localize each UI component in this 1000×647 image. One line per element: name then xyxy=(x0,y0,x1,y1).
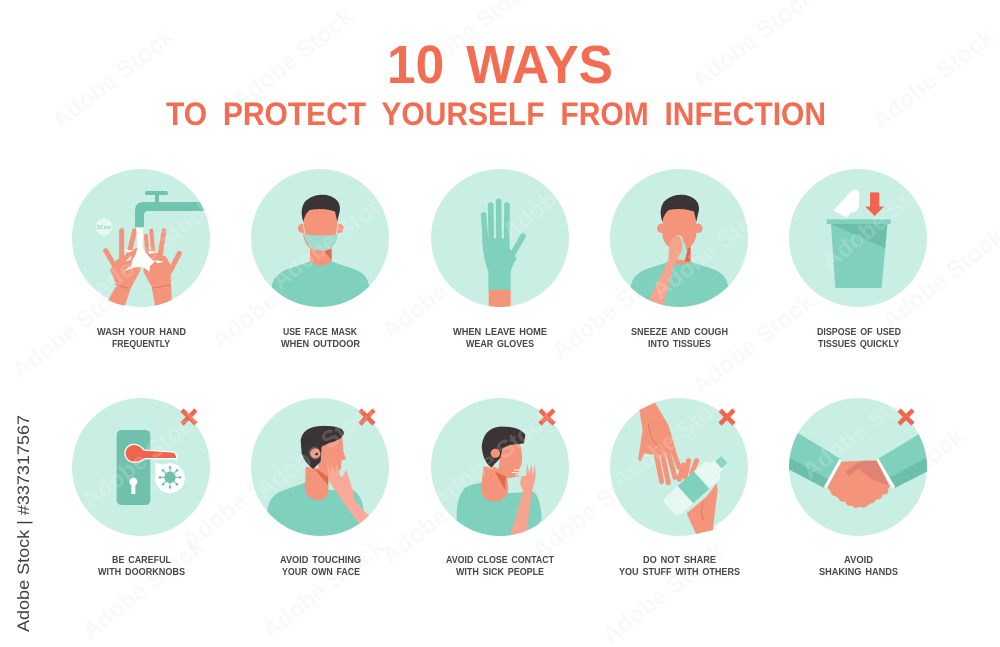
icon: handshake xyxy=(787,433,930,508)
panel: gloves xyxy=(431,169,569,350)
label: WITH DOORKNOBS xyxy=(98,567,185,578)
label: WHEN OUTDOOR xyxy=(281,339,361,350)
icon: man coughing into hand xyxy=(457,427,542,543)
infographic canvas: Adobe Stock xyxy=(87,193,220,305)
panel: shaking hands xyxy=(787,398,930,578)
icon: water tap xyxy=(135,191,204,227)
panel: face mask xyxy=(251,169,389,350)
infographic canvas: Adobe Stock xyxy=(817,163,950,275)
label xyxy=(97,327,186,350)
label: YOUR OWN FACE xyxy=(282,567,360,578)
label: TISSUES QUICKLY xyxy=(818,339,899,350)
infographic canvas: Adobe Stock xyxy=(647,193,780,305)
label: DISPOSE OF USED xyxy=(817,327,901,338)
icon: 20 sec timer xyxy=(96,218,112,236)
infographic canvas: Adobe Stock xyxy=(252,393,385,505)
icon: man touching his face xyxy=(267,426,370,543)
panel: sneeze into tissues xyxy=(610,169,748,350)
title: 10 WAYS xyxy=(387,35,613,95)
infographic canvas: Adobe Stock xyxy=(797,373,930,485)
label xyxy=(281,327,361,350)
label: WITH SICK PEOPLE xyxy=(456,567,544,578)
icon: man sneezing into tissue xyxy=(631,195,728,313)
label: FREQUENTLY xyxy=(112,339,170,350)
label xyxy=(819,555,898,578)
label: USE FACE MASK xyxy=(283,327,358,338)
panel: touching face xyxy=(251,398,389,578)
label xyxy=(280,555,361,578)
icon: hands passing a bottle xyxy=(638,403,732,534)
panel: dispose of tissues xyxy=(789,169,927,350)
title xyxy=(166,35,826,132)
icon: red cross xyxy=(540,410,554,424)
icon: door handle and virus xyxy=(117,430,185,505)
panel: wash your hand xyxy=(72,169,210,350)
icon: gloved hand xyxy=(482,201,523,310)
label xyxy=(446,555,554,578)
stock id side text: Adobe Stock | #337317567 xyxy=(14,415,33,632)
label: DO NOT SHARE xyxy=(643,555,716,566)
icon: red cross xyxy=(360,410,374,424)
infographic canvas: Adobe Stock xyxy=(427,403,560,515)
label: WHEN LEAVE HOME xyxy=(453,327,547,338)
label: INTO TISSUES xyxy=(648,339,711,350)
infographic canvas: Adobe Stock xyxy=(77,403,210,515)
label: WEAR GLOVES xyxy=(466,339,534,350)
title: TO PROTECT YOURSELF FROM INFECTION xyxy=(166,96,826,132)
icon: red cross xyxy=(899,410,913,424)
icon: 20 sec timer: 20 sec xyxy=(97,225,112,231)
icon: bin with tissue and arrow xyxy=(827,190,891,288)
infographic canvas: Adobe Stock xyxy=(607,383,740,495)
label xyxy=(631,327,728,350)
icon: red cross xyxy=(720,410,734,424)
infographic canvas: Adobe Stock xyxy=(497,133,630,245)
icon: washing hands xyxy=(106,228,179,306)
label xyxy=(619,555,740,578)
label: SHAKING HANDS xyxy=(819,567,898,578)
panel: do not share xyxy=(610,398,748,578)
label xyxy=(98,555,185,578)
label: AVOID xyxy=(844,555,873,566)
panel: close contact xyxy=(431,398,569,578)
icon: man wearing mask xyxy=(272,195,369,313)
label: WASH YOUR HAND xyxy=(97,327,186,338)
label: AVOID CLOSE CONTACT xyxy=(446,555,554,566)
label xyxy=(817,327,901,350)
label: YOU STUFF WITH OTHERS xyxy=(619,567,740,578)
label: BE CAREFUL xyxy=(112,555,171,566)
infographic canvas: Adobe Stock xyxy=(267,183,400,295)
label: SNEEZE AND COUGH xyxy=(631,327,728,338)
label: AVOID TOUCHING xyxy=(280,555,361,566)
panel: doorknobs xyxy=(72,398,210,578)
icon: red cross xyxy=(182,410,196,424)
label xyxy=(453,327,547,350)
